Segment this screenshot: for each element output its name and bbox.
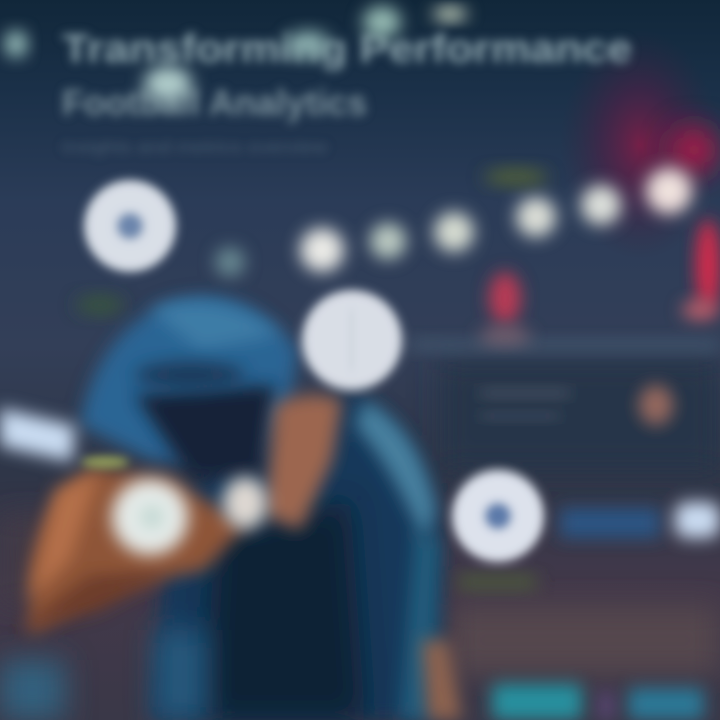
center glowing circle [302,290,402,390]
side light bars [0,408,720,538]
arm and forearm [265,395,342,530]
lower sleeves [155,630,205,720]
title: Football Analytics [62,82,367,123]
helmet [80,297,298,470]
ball glow in hand [112,477,267,555]
label strips [458,388,570,590]
ring icon: lower right [452,470,544,562]
red glow accents [479,126,720,345]
bottom buttons [492,684,704,720]
blurred player [0,297,462,720]
ring icon: upper left [84,180,176,272]
title: Transforming Performance [62,27,632,71]
stadium bands [0,338,720,675]
title: Insights and metrics overview [62,139,327,156]
top highlights [5,6,467,102]
title [62,27,632,156]
jersey [150,390,440,720]
timeline dots [76,168,692,425]
